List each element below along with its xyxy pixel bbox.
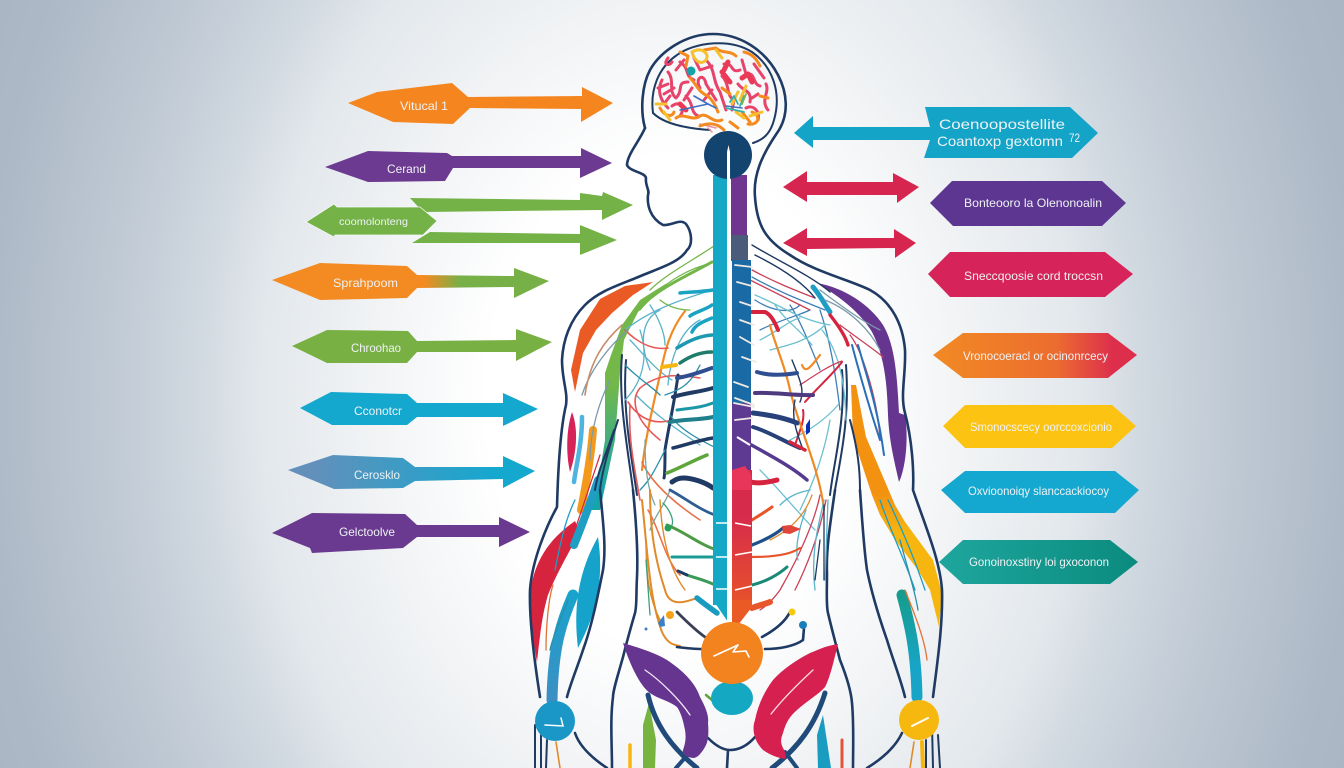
spine centre gap — [727, 145, 730, 625]
banner: blue with back arrow: Coantoxp gextomn — [937, 133, 1063, 149]
wrist circle: yellow — [899, 700, 939, 740]
arrow: Visual 1 — [348, 83, 613, 124]
arrow: Gelctoolve — [272, 513, 530, 553]
arrow: Sprahpoom — [272, 263, 549, 300]
body outline — [530, 34, 942, 768]
arm muscles — [530, 262, 942, 700]
arrow: Cerosklo: Cerosklo — [354, 468, 400, 482]
label: yellow: Smonocscecy oorccoxcionio — [970, 420, 1112, 434]
label: crimson: Sneccqoosie cord troccsn — [964, 269, 1103, 283]
banner: blue with back arrow: Coenoopostellite — [939, 116, 1065, 132]
label: yellow — [943, 405, 1136, 448]
arrow: Cconotcr: Cconotcr — [354, 404, 402, 418]
left arrows — [272, 83, 633, 553]
arrow: Cerarnd — [325, 148, 612, 182]
arrow: Sprahpoom: Sprahpoom — [333, 276, 398, 290]
banner: blue with back arrow: 72 — [1069, 131, 1080, 145]
arrow: Cerarnd: Cerand — [387, 162, 426, 176]
brain stem circle — [704, 131, 752, 179]
right labels and arrows — [783, 107, 1139, 584]
arrow: Cconotcr — [300, 392, 538, 426]
arrow: Cerosklo — [288, 455, 535, 489]
label: purple — [930, 181, 1126, 226]
label: crimson — [928, 252, 1133, 297]
label: teal: Gonoinoxstiny loi gxoconon — [969, 555, 1109, 569]
arrow: green label: coomolonteng — [339, 216, 408, 228]
arrow: green upper shaft — [410, 192, 633, 220]
orange pelvic circle — [701, 622, 763, 684]
label: blue — [941, 471, 1139, 513]
nerve web — [546, 245, 927, 660]
label: blue: Oxvioonoiqy slanccackiocoy — [968, 484, 1109, 498]
label: teal — [939, 540, 1138, 584]
arrow: Visual 1: Vitucal 1 — [400, 99, 448, 113]
label: orange-red: Vronocoeracl or ocinonrcecy — [963, 349, 1108, 363]
arrow: green label — [306, 204, 437, 237]
arrow: red double lower — [783, 228, 916, 258]
leg nerves — [630, 693, 842, 768]
spine — [713, 175, 756, 625]
ribs and spine branches — [667, 260, 813, 649]
body figure — [530, 34, 942, 768]
arrow: green lower shaft — [412, 225, 617, 255]
arrow: Chroohiao: Chroohao — [351, 341, 401, 355]
arrow: Gelctoolve: Gelctoolve — [339, 525, 395, 539]
nerve end dots — [644, 419, 810, 630]
label: orange-red — [933, 333, 1137, 378]
purple hip leaf — [623, 643, 708, 758]
teal pelvic blob — [711, 681, 753, 715]
arrow: red double upper — [783, 171, 919, 203]
label: purple: Bonteooro la Olenonoalin — [964, 196, 1102, 210]
banner: blue with back arrow — [794, 107, 1098, 158]
arrow: Chroohiao — [292, 329, 552, 363]
brain — [656, 48, 768, 132]
wrist circle: blue — [535, 701, 575, 741]
crimson hip leaf — [754, 644, 838, 759]
